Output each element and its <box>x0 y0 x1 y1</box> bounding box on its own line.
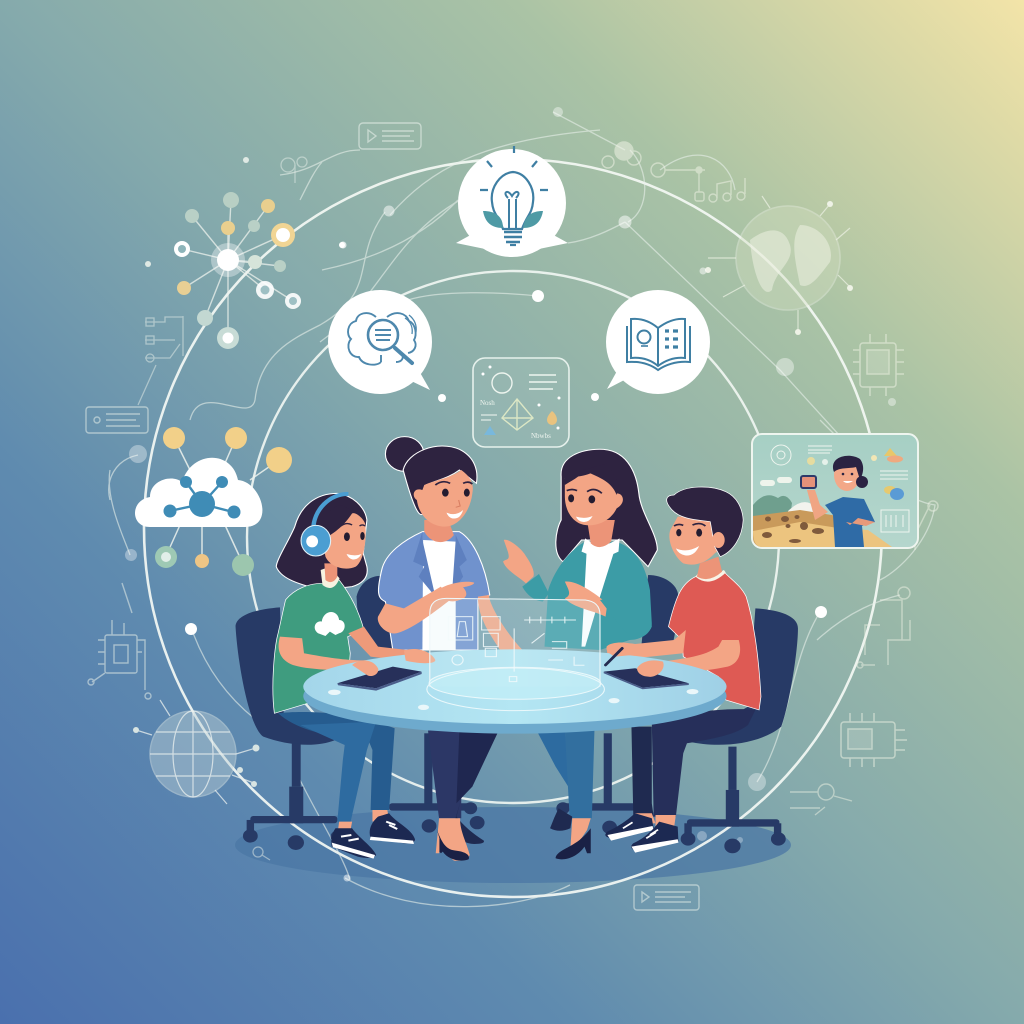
chip icon right lower <box>841 713 907 767</box>
glass data panel: Nbwbs <box>531 432 551 440</box>
round table <box>303 649 727 734</box>
tablet right <box>604 668 689 689</box>
cloud network icon <box>135 427 292 576</box>
chair: right <box>689 608 798 745</box>
globe bottom left <box>133 700 260 804</box>
tablet left <box>337 667 422 691</box>
person: boy in red <box>605 487 761 853</box>
bubble: brain and magnifier <box>328 290 432 394</box>
photo card widgets <box>771 445 909 532</box>
photo card: field work <box>752 434 918 548</box>
chair: back centre right <box>641 575 678 653</box>
circuit traces right <box>857 501 938 668</box>
small key icon top left <box>281 157 307 183</box>
circuit branch left upper <box>138 316 183 405</box>
glass data panel: Nosh <box>480 399 495 407</box>
video note icon top <box>359 123 421 149</box>
bubble: open book <box>606 290 710 394</box>
person: girl with headphones <box>273 493 415 859</box>
chip icon right upper <box>853 334 904 396</box>
search node bottom right <box>790 784 852 815</box>
network constellation top left <box>145 157 345 349</box>
chair: left <box>236 607 335 745</box>
bubble: lightbulb idea <box>456 146 568 257</box>
group of students at table <box>236 437 798 861</box>
hands on table <box>352 643 664 677</box>
holographic display dome <box>427 598 604 711</box>
floor shadow <box>235 807 791 883</box>
note card left <box>86 407 148 433</box>
person: woman with bun <box>378 437 530 861</box>
inner orbit ring <box>247 271 779 803</box>
outer orbit ring <box>144 159 882 897</box>
person: woman in teal <box>503 449 657 859</box>
stylus <box>606 648 622 665</box>
chair: back centre left <box>357 576 396 650</box>
chairs <box>236 575 798 853</box>
floating orbit dots <box>125 107 896 882</box>
globe top right <box>705 196 853 335</box>
photo card figure <box>801 456 875 547</box>
icon: brain search <box>348 313 416 365</box>
music and gear cluster top right <box>602 142 745 202</box>
circuit chip left lower <box>88 583 151 699</box>
icon: book <box>627 319 690 370</box>
magnifier bottom left <box>253 847 270 860</box>
connector lines <box>109 112 935 907</box>
headphones <box>313 494 348 530</box>
note card bottom <box>634 885 699 910</box>
icon: lightbulb with leaves <box>480 146 548 245</box>
chair bases <box>243 733 786 853</box>
cloud shirt logo <box>315 612 345 636</box>
glass data panel <box>473 358 569 447</box>
